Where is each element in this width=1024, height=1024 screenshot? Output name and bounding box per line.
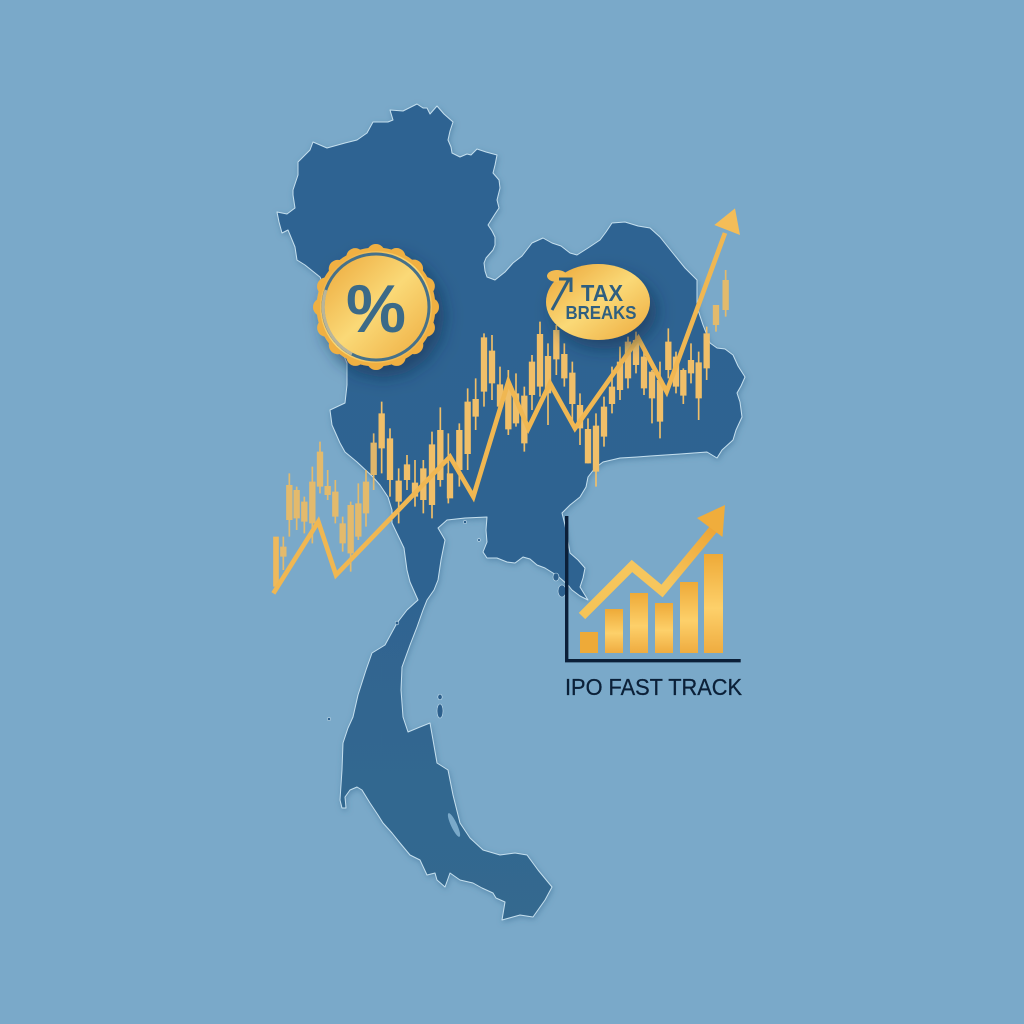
candlestick chart with rising trend arrow (273, 208, 740, 593)
chart caption: IPO FAST TRACK (565, 674, 742, 700)
map of Thailand (277, 104, 745, 920)
arrow icon (552, 279, 571, 310)
faded candles over sea (283, 270, 726, 572)
lagoon (446, 812, 462, 838)
trend arrowhead (714, 208, 740, 235)
first bar of trend (267, 537, 284, 587)
tax breaks badge (546, 264, 650, 340)
oval bump (547, 270, 567, 282)
IPO fast track bar chart (565, 505, 742, 700)
trend line (273, 233, 725, 593)
candles over land (382, 322, 707, 523)
scalloped seal (316, 248, 436, 366)
bars (580, 554, 723, 653)
tax breaks label: TAX (581, 280, 624, 306)
gold oval (546, 264, 650, 340)
percent sign: % (346, 271, 406, 347)
axes (567, 516, 741, 661)
percent badge (316, 248, 436, 366)
tax breaks badge: BREAKS (566, 303, 636, 323)
gold disc (320, 251, 432, 363)
ring (323, 254, 429, 360)
islands (327, 520, 566, 721)
chart arrow (582, 526, 716, 616)
